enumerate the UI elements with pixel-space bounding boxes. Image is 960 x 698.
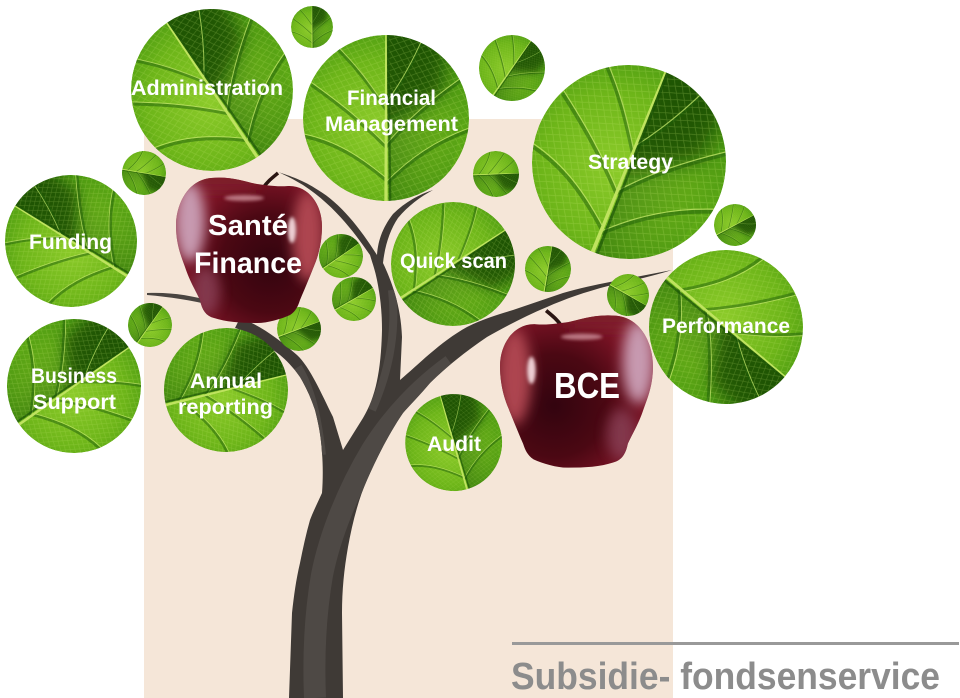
- leaf: small by branch two: [324, 267, 387, 329]
- leaf: small left: [119, 148, 173, 199]
- leaf: Financial Management: Financial: [347, 87, 436, 110]
- leaf: small centre: [472, 150, 523, 198]
- leaf: Annual reporting: reporting: [178, 396, 273, 419]
- leaf: small by branch one: [310, 223, 374, 287]
- leaf: small top: [291, 3, 333, 48]
- leaf: small lower left: [119, 292, 183, 356]
- leaf: Performance: [618, 219, 843, 443]
- leaf: Quick scan: Quick scan: [400, 250, 507, 273]
- leaf: Audit: Audit: [427, 433, 481, 456]
- apple: BCE: [491, 308, 658, 476]
- footer title: Subsidie- fondsenservice: [511, 656, 940, 698]
- leaf: Business Support: Support: [33, 391, 116, 414]
- apple: Santé Finance: [171, 171, 331, 331]
- tree trunk and branches: [147, 172, 672, 698]
- leaf: Funding: [0, 145, 162, 332]
- leaf: Financial Management: Management: [325, 113, 458, 136]
- leaf: Business Support: [0, 287, 176, 479]
- leaf: Annual reporting: Annual: [190, 370, 262, 393]
- leaf: Administration: [93, 0, 324, 202]
- leaf: Performance: Performance: [662, 315, 790, 338]
- leaf: Financial Management: [303, 23, 469, 201]
- leaf: Quick scan: [367, 173, 547, 350]
- apple: Santé Finance: Santé: [208, 210, 288, 242]
- leaf: small right: [707, 195, 766, 253]
- leaf: Business Support: Business: [31, 365, 117, 388]
- leaf: Administration: Administration: [131, 77, 283, 100]
- leaf: small below apple: [271, 300, 330, 357]
- beige background panel: [144, 119, 673, 698]
- apple: Santé Finance: Finance: [194, 247, 302, 280]
- leaf: Funding: Funding: [29, 231, 112, 254]
- leaf: Audit: [392, 376, 514, 503]
- leaf: small beside Quick scan: [521, 239, 575, 296]
- leaf: Annual reporting: [151, 313, 310, 465]
- leaf: small upper right: [466, 18, 561, 114]
- apple: BCE: BCE: [554, 365, 620, 406]
- leaf: Strategy: Strategy: [588, 151, 673, 174]
- leaf: small on branch tip: [599, 266, 659, 325]
- leaf: Strategy: [503, 22, 761, 288]
